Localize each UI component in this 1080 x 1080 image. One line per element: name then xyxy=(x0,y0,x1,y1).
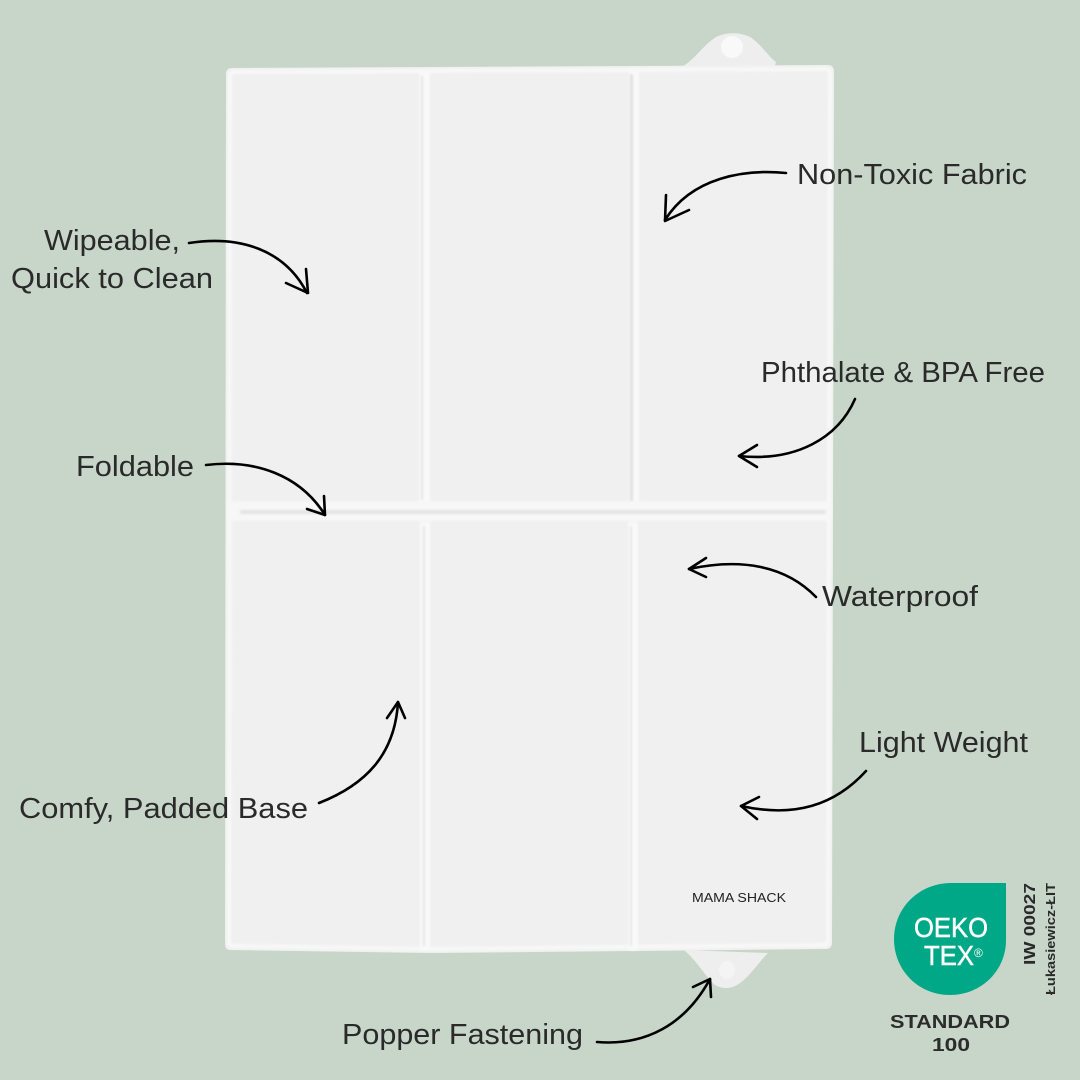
arrow: Comfy xyxy=(319,702,405,803)
label: Popper Fastening: Popper Fastening xyxy=(342,1019,583,1051)
badge number: IW 00027 xyxy=(1022,883,1039,965)
label: Wipeable, Quick to Clean xyxy=(11,225,213,295)
arrow: Popper xyxy=(597,979,711,1042)
label: Wipeable, Quick to Clean: Quick to Clean xyxy=(11,263,213,295)
label: Non-Toxic Fabric: Non-Toxic Fabric xyxy=(797,159,1027,191)
standard text: STANDARD xyxy=(890,1011,1010,1032)
100 text: 100 xyxy=(932,1034,970,1055)
badge wordmark xyxy=(914,912,988,971)
label: Waterproof: Waterproof xyxy=(822,581,979,613)
badge wordmark: ® xyxy=(974,946,983,960)
changing mat xyxy=(225,33,834,988)
bottom popper tab xyxy=(684,950,768,988)
arrow: Waterproof xyxy=(689,558,816,597)
mat bright edges xyxy=(229,69,830,949)
label: Wipeable, Quick to Clean: Wipeable, xyxy=(44,225,180,257)
arrow: Wipeable xyxy=(189,241,308,293)
top popper tab xyxy=(680,33,776,69)
arrow: Foldable xyxy=(206,464,325,515)
arrow: Light Weight xyxy=(741,771,866,819)
arrow: Non-Toxic Fabric xyxy=(665,172,786,221)
label: Light Weight: Light Weight xyxy=(859,727,1028,759)
label: Phthalate & BPA Free: Phthalate & BPA Free xyxy=(761,357,1045,389)
badge institute: Łukasiewicz-ŁIT xyxy=(1044,883,1058,995)
mat body xyxy=(225,65,834,953)
badge wordmark: TEX xyxy=(924,940,974,971)
arrow: Phthalate xyxy=(739,399,855,467)
brand: MAMA SHACK: MAMA SHACK xyxy=(692,891,787,905)
label: Comfy, Padded Base: Comfy, Padded Base xyxy=(19,793,308,825)
label: Foldable: Foldable xyxy=(76,451,194,483)
fold lines xyxy=(227,70,831,950)
badge wordmark: OEKO xyxy=(914,912,988,943)
OEKO-TEX certification badge xyxy=(890,883,1058,1055)
icon: green drop xyxy=(894,883,1006,995)
